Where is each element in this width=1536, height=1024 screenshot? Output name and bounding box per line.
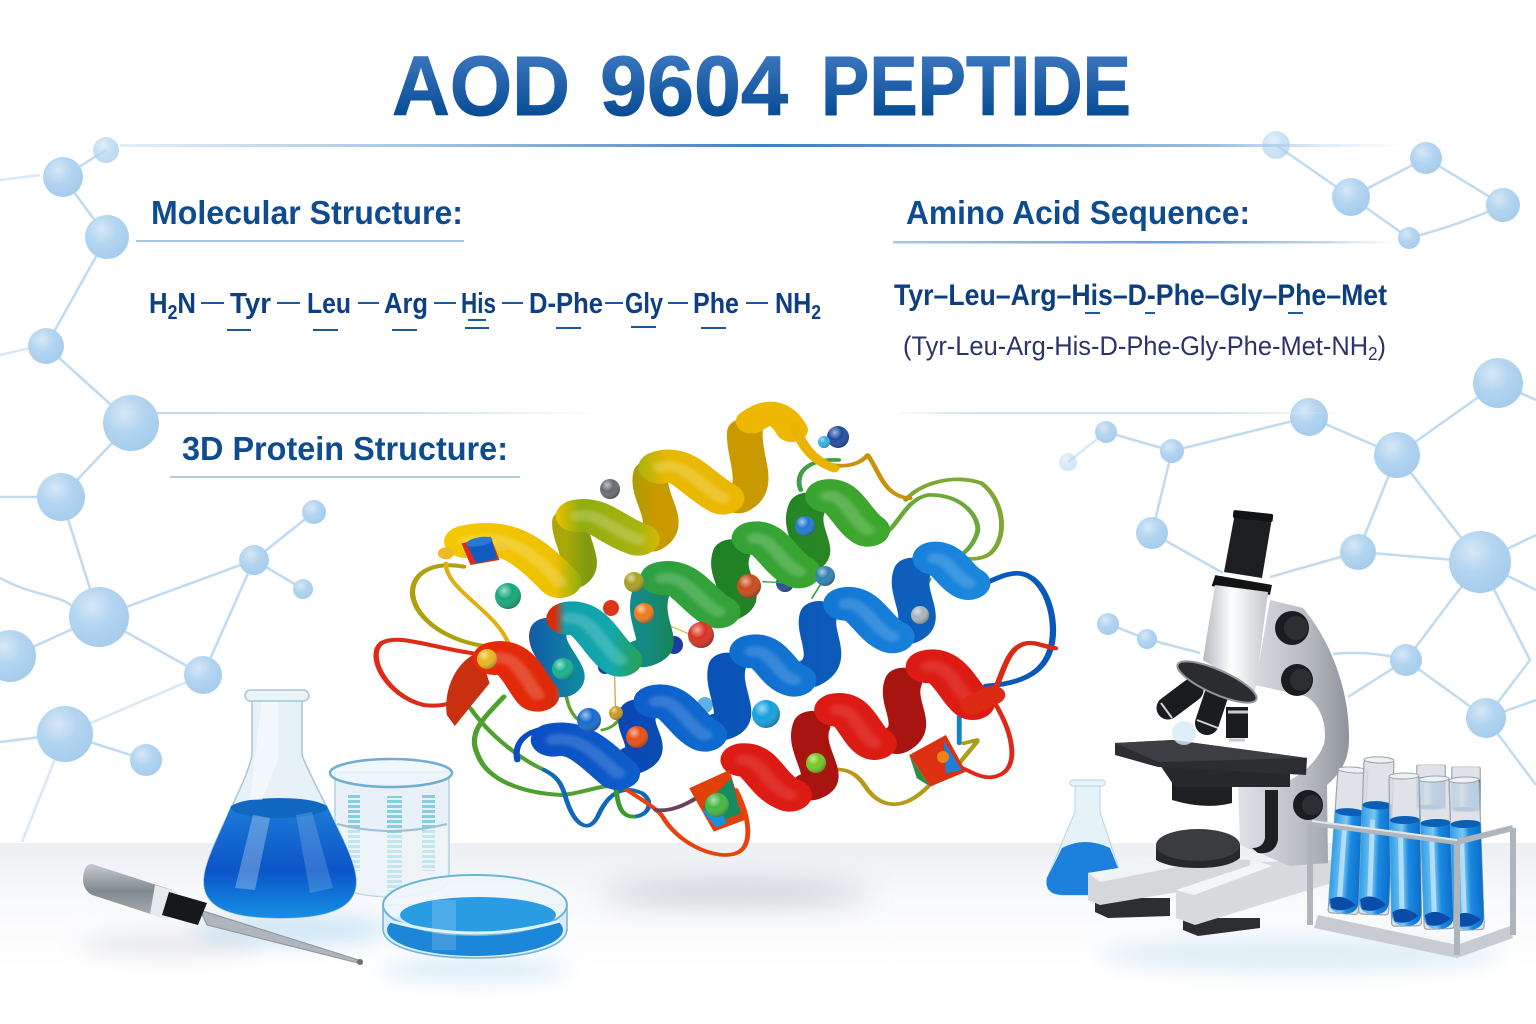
glass reflections — [80, 914, 570, 982]
heading: 3d protein structure: 3D Protein Structure: — [182, 430, 508, 467]
conical flask — [204, 690, 356, 918]
spheres in front — [477, 426, 949, 817]
amino acid sequence text: ) — [1378, 331, 1386, 361]
small flask — [1047, 780, 1122, 895]
molecular structure formula: Tyr — [230, 288, 271, 320]
base — [1095, 898, 1170, 918]
objective turret — [1173, 654, 1261, 710]
helix: red teal green — [495, 496, 868, 695]
network nodes right — [1059, 131, 1523, 738]
molecular structure formula: Leu — [307, 288, 351, 320]
stage — [1172, 775, 1232, 806]
heading: molecular structure: Molecular Structure: — [151, 194, 463, 231]
amino acid sequence text: Tyr–Leu–Arg–His–D-Phe–Gly–Phe–Met — [894, 279, 1387, 312]
amino acid sequence text — [894, 279, 1387, 364]
petri dish — [383, 875, 567, 958]
main tube — [1203, 585, 1268, 692]
molecular structure formula: Phe — [693, 288, 739, 320]
background molecular network — [0, 131, 1536, 842]
molecular structure formula: Gly — [625, 288, 663, 320]
beta block: bottom — [689, 770, 745, 832]
helix: red — [743, 666, 993, 795]
microscope — [1088, 510, 1349, 936]
molecular structure formula: His — [461, 288, 496, 320]
helix: yellow green — [466, 414, 834, 582]
eyepiece — [1224, 513, 1272, 578]
table surface — [0, 843, 1536, 1024]
knobs — [1275, 611, 1309, 645]
beta block: top left — [438, 535, 508, 565]
pipette — [83, 864, 363, 965]
test tube rack — [1310, 756, 1513, 958]
molecular structure formula: N — [177, 288, 196, 320]
molecular structure formula: D-Phe — [529, 288, 603, 320]
arm — [1238, 600, 1349, 866]
protein floor shadow — [600, 881, 870, 905]
title: AOD — [392, 39, 570, 133]
floor reflection — [1100, 937, 1500, 973]
amino acid sequence text: (Tyr-Leu-Arg-His-D-Phe-Gly-Phe-Met-NH — [903, 331, 1397, 361]
molecular structure formula: Arg — [384, 288, 428, 320]
lab glassware left — [80, 690, 570, 982]
objectives — [1168, 690, 1192, 708]
molecular structure formula: 2 — [811, 302, 821, 324]
beta block: right — [909, 735, 966, 787]
spheres behind ribbon — [598, 479, 794, 713]
title — [392, 39, 1131, 133]
ribbon strands — [376, 414, 1055, 855]
amino acid sequence text: 2 — [1368, 344, 1378, 364]
lab equipment right — [1047, 510, 1513, 973]
thin loops — [376, 455, 1055, 855]
focus disc — [1156, 845, 1240, 868]
molecular structure formula — [149, 288, 821, 330]
title: 9604 — [600, 39, 788, 133]
title: PEPTIDE — [821, 39, 1131, 133]
network lines — [0, 145, 1536, 842]
helix: blue — [553, 558, 968, 773]
red fold — [446, 652, 490, 726]
3D protein ribbon — [376, 414, 1055, 855]
molecular structure formula: NH — [775, 288, 817, 320]
network nodes left — [0, 137, 326, 776]
molecular structure formula: 2 — [168, 302, 177, 324]
molecular structure formula: H — [149, 288, 170, 320]
heading: amino acid sequence: Amino Acid Sequence: — [906, 194, 1250, 231]
beaker — [330, 759, 452, 897]
